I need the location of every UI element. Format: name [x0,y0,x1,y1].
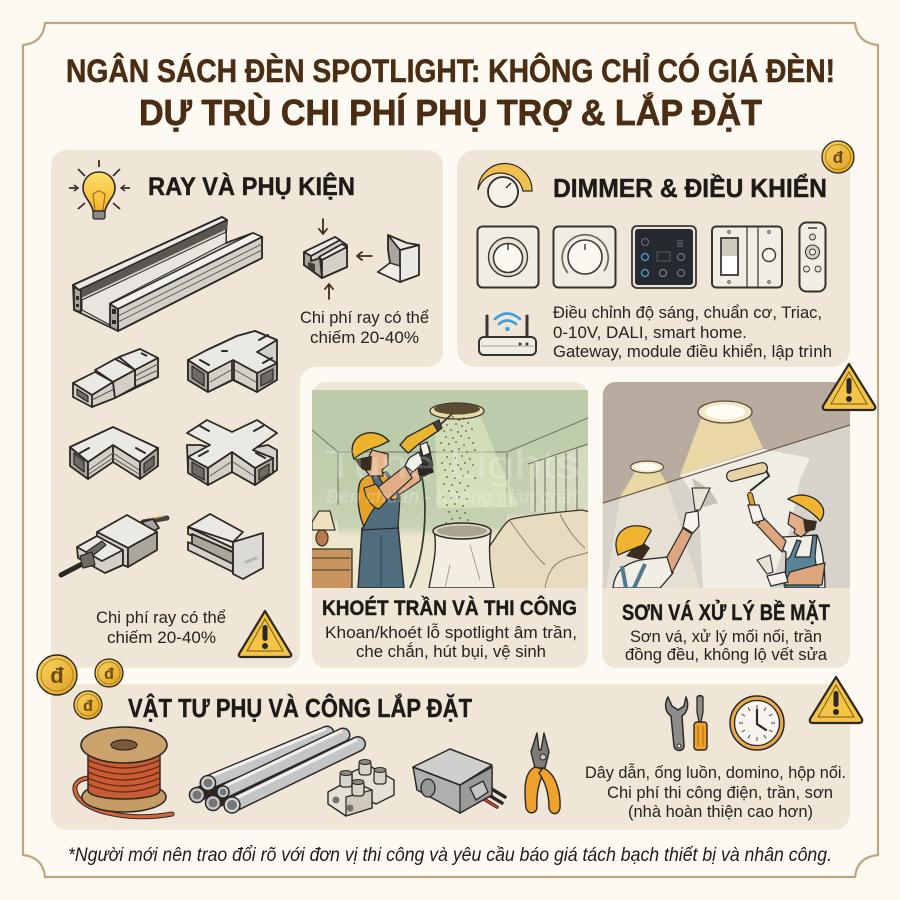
icon: wire spool [75,727,172,817]
icon: light bulb with arrows [69,160,130,219]
icon: clock [730,696,784,750]
heading: DIMMER & ĐIỀU KHIỂN [553,173,827,203]
icon: warning triangle [239,611,291,657]
panel: sơn vá xử lý bề mặt [602,382,851,668]
icon: rotary dimmer plate [478,226,538,288]
icon: rotary dimmer with scale [554,226,616,288]
icon: coins cluster: đ [83,698,93,715]
text: materials description: Chi phí thi công điện, trần, sơn [607,783,833,802]
icon: wifi router [479,314,536,355]
covered sofa [488,510,590,589]
heading: VẬT TƯ PHỤ VÀ CÔNG LẮP ĐẶT [128,693,472,723]
icon: toggle and push switch [712,226,782,288]
text: drilling description: che chắn, hút bụi, vệ sinh [356,642,546,661]
icon: dimmer dial [478,164,532,207]
illustration: worker drilling ceiling [305,390,590,589]
icon: straight coupler [73,349,158,407]
icon: live-end power feed [61,515,167,575]
icon: warning triangle top right [823,364,875,410]
text: materials description: Dây dẫn, ống luồn, domino, hộp nối. [585,763,846,782]
title: DỰ TRÙ CHI PHÍ PHỤ TRỢ & LẮP ĐẶT [139,91,762,133]
icon: coin [822,141,854,173]
drill [400,414,452,478]
icon: conduit pipes [190,729,358,813]
panel: ray và phụ kiện [51,150,443,668]
icon: junction box [413,749,505,813]
title [66,53,835,133]
curtain [528,444,588,512]
watermark [326,449,578,507]
icon: X connector [187,420,277,485]
text: track cost note [300,309,429,347]
illustration: workers patching and painting [602,382,851,588]
light beams [680,416,763,475]
panel: dimmer và điều khiển [457,141,854,367]
text: dimmer description: Gateway, module điều khiển, lập trình [553,342,832,361]
icon: wrench [666,697,688,750]
connector cap [378,235,400,282]
text: painting description [625,628,828,664]
text: drilling description [325,623,577,661]
text: track cost note: chiếm 20-40% [310,329,419,347]
text: track cost note lower: chiếm 20-40% [107,629,216,647]
icon: pliers [525,733,560,814]
dust bag [429,523,494,588]
watermark: Tune Lights [325,443,580,487]
icon: end connector with arrows [304,219,419,299]
icon: coins cluster [37,655,123,719]
light beam [435,415,518,508]
worker [352,414,452,588]
icon: T connector [188,331,277,392]
worker left with scraper [613,488,710,588]
icon: coins cluster: đ [50,663,64,688]
text: track cost note lower [96,609,226,647]
icon: coins cluster: đ [104,666,114,683]
panel: khoét trần và thi công [305,382,590,668]
heading: SƠN VÁ XỬ LÝ BỀ MẶT [622,600,830,625]
dust falling [441,417,475,526]
icon: domino terminals [328,760,394,816]
text: drilling description: Khoan/khoét lỗ spotlight âm trần, [325,623,577,642]
icon: track end cap [188,514,263,579]
painted patches [680,449,810,588]
arrows [319,219,372,299]
text: materials description [585,763,846,821]
icon: remote control [800,222,826,292]
worker right with roller [732,466,825,588]
panel: vật tư phụ và công lắp đặt [51,684,850,830]
text: painting description: Sơn vá, xử lý mối nối, trần [630,628,822,646]
text: track cost note lower: Chi phí ray có thể [96,609,226,627]
icon: L connector [70,427,158,479]
icon: warning triangle bottom right [810,677,862,723]
icon: screwdriver [694,696,707,750]
ceiling lights [630,401,752,473]
text: dimmer description: Điều chỉnh độ sáng, chuẩn cơ, Triac, [553,303,822,322]
heading: RAY VÀ PHỤ KIỆN [148,171,355,201]
text: materials description: (nhà hoàn thiện cao hơn) [628,802,813,821]
heading: KHOÉT TRẦN VÀ THI CÔNG [322,595,577,620]
icon: straight track rail [73,217,262,331]
text: dimmer description: 0-10V, DALI, smart home. [553,323,747,342]
ceiling hole [430,403,484,419]
watermark: Đèn chuẩn - Không gian chất [326,487,579,508]
footer note: *Người mới nên trao đổi rõ với đơn vị thi công và yêu cầu báo giá tách bạch thiết bị và nhân công. [68,844,832,866]
text: track cost note: Chi phí ray có thể [300,309,429,327]
text: painting description: đồng đều, không lộ vết sửa [625,646,828,664]
icon: smart touch panel [632,226,696,288]
icon: coin: đ [833,148,844,167]
lamp and dresser [312,510,353,588]
text: dimmer description [553,303,832,361]
